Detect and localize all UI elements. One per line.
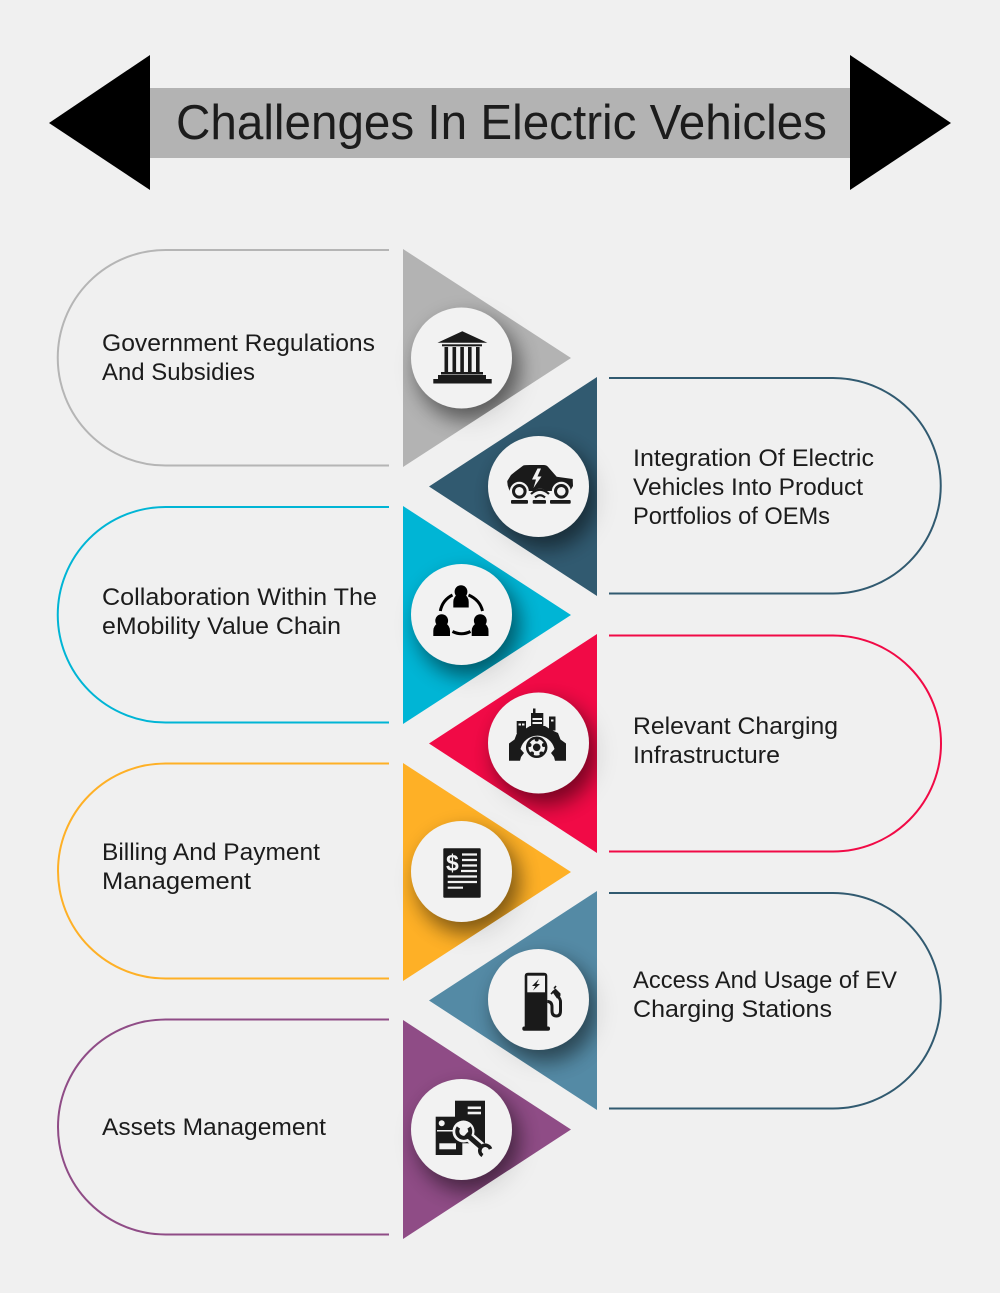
text: charging infrastructure xyxy=(633,713,838,769)
text: billing and payment xyxy=(102,839,320,895)
text: integration of EVs: Vehicles Into Product xyxy=(633,474,863,501)
text: access and usage: Charging Stations xyxy=(633,996,832,1023)
text: government regulations xyxy=(102,330,375,386)
text: charging infrastructure: Infrastructure xyxy=(633,742,780,769)
text: government regulations: Government Regulations xyxy=(102,330,375,357)
title banner: double-headed arrow xyxy=(49,55,951,190)
panel: integration of EVs xyxy=(429,377,941,596)
text: access and usage xyxy=(633,967,897,1023)
panel: access and usage xyxy=(429,891,941,1110)
text: collaboration: eMobility Value Chain xyxy=(102,613,341,640)
panel: government regulations xyxy=(58,249,571,467)
icon: invoice document: $ xyxy=(446,850,459,876)
text: integration of EVs: Portfolios of OEMs xyxy=(633,503,830,530)
text: billing and payment: Billing And Payment xyxy=(102,839,320,866)
text: charging infrastructure: Relevant Charging xyxy=(633,713,838,740)
icon: bank building xyxy=(433,331,492,384)
panel: charging infrastructure xyxy=(429,634,941,853)
text: collaboration xyxy=(102,584,377,640)
text: access and usage: Access And Usage of EV xyxy=(633,967,897,994)
icon: servers and wrench xyxy=(436,1101,490,1156)
icon: electric car xyxy=(507,465,573,504)
text: billing and payment: Management xyxy=(102,868,251,895)
panel: assets management xyxy=(58,1020,571,1239)
panel: collaboration xyxy=(58,506,571,724)
text: collaboration: Collaboration Within The xyxy=(102,584,377,611)
icon: invoice document xyxy=(443,848,481,898)
icon: gear with city xyxy=(509,708,566,761)
icon: charging station xyxy=(522,973,561,1031)
text: integration of EVs xyxy=(633,445,874,530)
icon: connected people xyxy=(433,585,488,636)
text: assets management: Assets Management xyxy=(102,1114,326,1141)
text: government regulations: And Subsidies xyxy=(102,359,255,386)
title: Challenges In Electric Vehicles xyxy=(176,96,827,150)
panel: billing and payment xyxy=(58,763,571,981)
text: integration of EVs: Integration Of Electric xyxy=(633,445,874,472)
